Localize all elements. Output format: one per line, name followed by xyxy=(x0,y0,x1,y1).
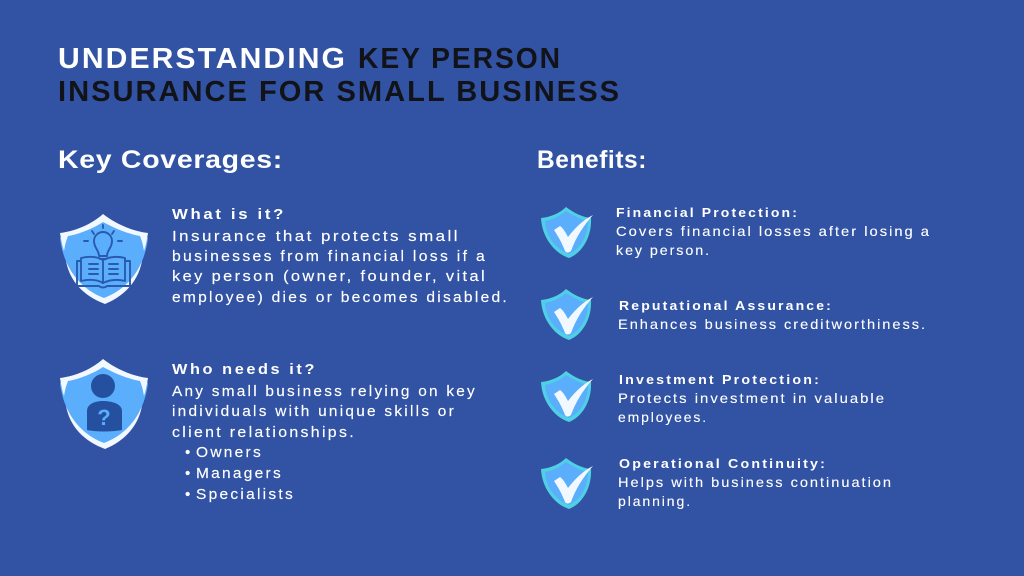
icon: check shield 3 xyxy=(541,371,593,422)
benefit: operational continuity: planning. xyxy=(618,493,692,509)
icon: shield with lightbulb and book xyxy=(60,214,148,304)
benefit: reputational assurance: Enhances business creditworthiness. xyxy=(618,316,927,332)
text block: who needs it: • xyxy=(185,465,192,482)
heading: key coverages: Key Coverages: xyxy=(58,146,283,174)
text block: what is it: businesses from financial loss if a xyxy=(172,248,487,265)
text block: who needs it: • xyxy=(185,486,192,503)
icon: shield with person and question mark xyxy=(60,359,148,449)
benefit: investment protection: Investment Protection: xyxy=(619,372,821,387)
text block: who needs it xyxy=(172,361,477,503)
benefit: financial protection xyxy=(616,205,931,258)
icon: check shield 4 xyxy=(541,458,593,509)
text block: who needs it: Owners xyxy=(196,444,263,461)
heading: benefits: Benefits: xyxy=(537,146,647,174)
benefit: investment protection: employees. xyxy=(618,409,708,425)
title: UNDERSTANDING xyxy=(58,43,347,75)
benefit: reputational assurance xyxy=(618,298,927,332)
icon: check shield 2 xyxy=(541,289,593,340)
icon: check shield 1 xyxy=(541,207,593,258)
text block: who needs it: Managers xyxy=(196,465,283,482)
text block: what is it: What is it? xyxy=(172,206,286,223)
text block: what is it: key person (owner, founder, vital xyxy=(172,268,487,285)
benefit: reputational assurance: Reputational Assurance: xyxy=(619,298,833,313)
benefit: financial protection: Financial Protection: xyxy=(616,205,799,220)
text block: who needs it: client relationships. xyxy=(172,424,356,441)
benefit: investment protection: Protects investment in valuable xyxy=(618,390,886,406)
benefit: financial protection: Covers financial losses after losing a xyxy=(616,223,931,239)
benefit: operational continuity: Operational Continuity: xyxy=(619,456,827,471)
benefit: operational continuity: Helps with business continuation xyxy=(618,474,893,490)
title: KEY PERSON xyxy=(358,43,562,75)
text block: who needs it: Specialists xyxy=(196,486,295,503)
text block: who needs it: Any small business relying on key xyxy=(172,383,477,400)
icon: shield with person and question mark: ? xyxy=(97,405,111,430)
benefit: financial protection: key person. xyxy=(616,242,711,258)
title xyxy=(58,43,621,108)
text block: what is it: Insurance that protects small xyxy=(172,228,460,245)
text block: who needs it: individuals with unique skills or xyxy=(172,403,456,420)
benefit: investment protection xyxy=(618,372,886,425)
title: INSURANCE FOR SMALL BUSINESS xyxy=(58,76,621,108)
text block: who needs it: Who needs it? xyxy=(172,361,317,378)
text block: who needs it: • xyxy=(185,444,192,461)
text block: what is it xyxy=(172,206,509,306)
text block: what is it: employee) dies or becomes disabled. xyxy=(172,289,509,306)
benefit: operational continuity xyxy=(618,456,893,509)
